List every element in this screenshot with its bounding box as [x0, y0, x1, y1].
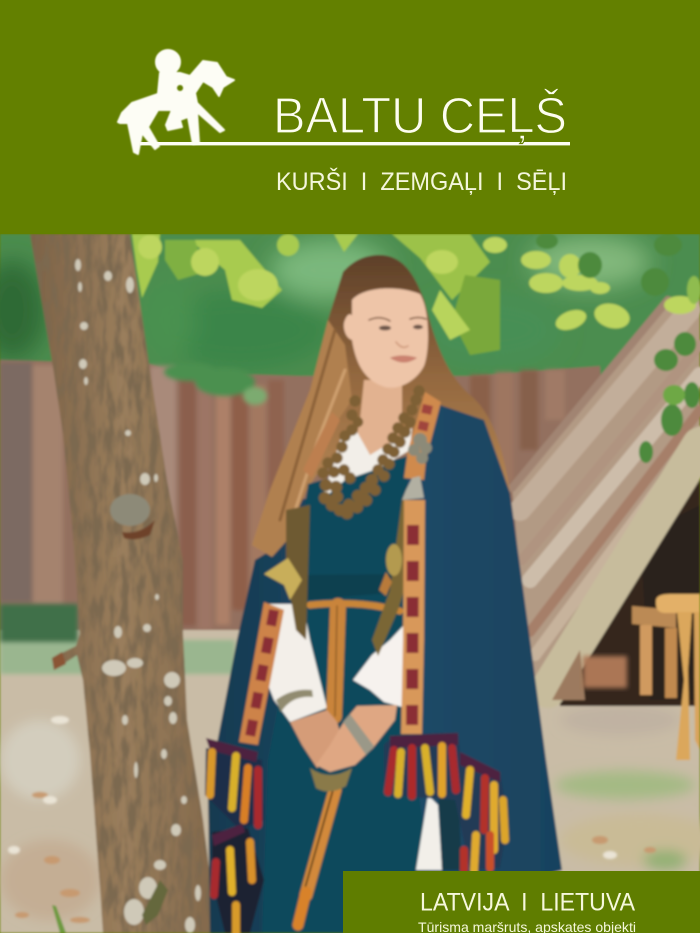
right patterned band	[401, 392, 441, 734]
photo: woman in Baltic costume beside a tree	[0, 233, 700, 933]
white blouse collar	[322, 428, 412, 500]
bronze chains	[284, 499, 405, 794]
right sleeve	[353, 625, 404, 707]
tree trunk	[30, 234, 217, 933]
skirt slit	[416, 795, 442, 870]
brooches	[264, 433, 432, 600]
shadow inside slit	[438, 798, 462, 870]
facial features	[369, 318, 426, 362]
box heading: LATVIJA I LIETUVA	[420, 888, 635, 916]
long hair, back layer	[310, 254, 510, 489]
left fringe	[205, 738, 264, 933]
ground and grass	[0, 604, 700, 933]
log hut	[512, 297, 700, 706]
header band	[0, 0, 700, 234]
orange belt and straps	[298, 603, 400, 925]
title: BALTU CEĻŠ	[273, 87, 567, 144]
oak and linden leaves	[132, 233, 700, 463]
logo: horse and rider	[118, 50, 234, 154]
title rule	[140, 142, 570, 145]
bark marks	[52, 259, 201, 933]
face, neck and chest	[355, 380, 402, 458]
background foliage	[0, 234, 700, 384]
wooden fence	[0, 360, 620, 640]
foliage hanging over the fence	[164, 363, 267, 405]
stool and table	[632, 594, 700, 760]
hair strands	[280, 330, 345, 520]
info box	[343, 871, 700, 933]
left sleeve	[262, 604, 327, 722]
woman	[205, 255, 562, 933]
hands and bracelets	[276, 690, 397, 772]
subtitle: KURŠI I ZEMGAĻI I SĒĻI	[276, 167, 567, 196]
right fringe	[384, 733, 508, 870]
cape	[208, 405, 562, 933]
bead necklace	[318, 386, 424, 518]
dress	[262, 456, 430, 933]
left patterned band	[239, 412, 340, 745]
long hair, front lock	[252, 320, 352, 557]
